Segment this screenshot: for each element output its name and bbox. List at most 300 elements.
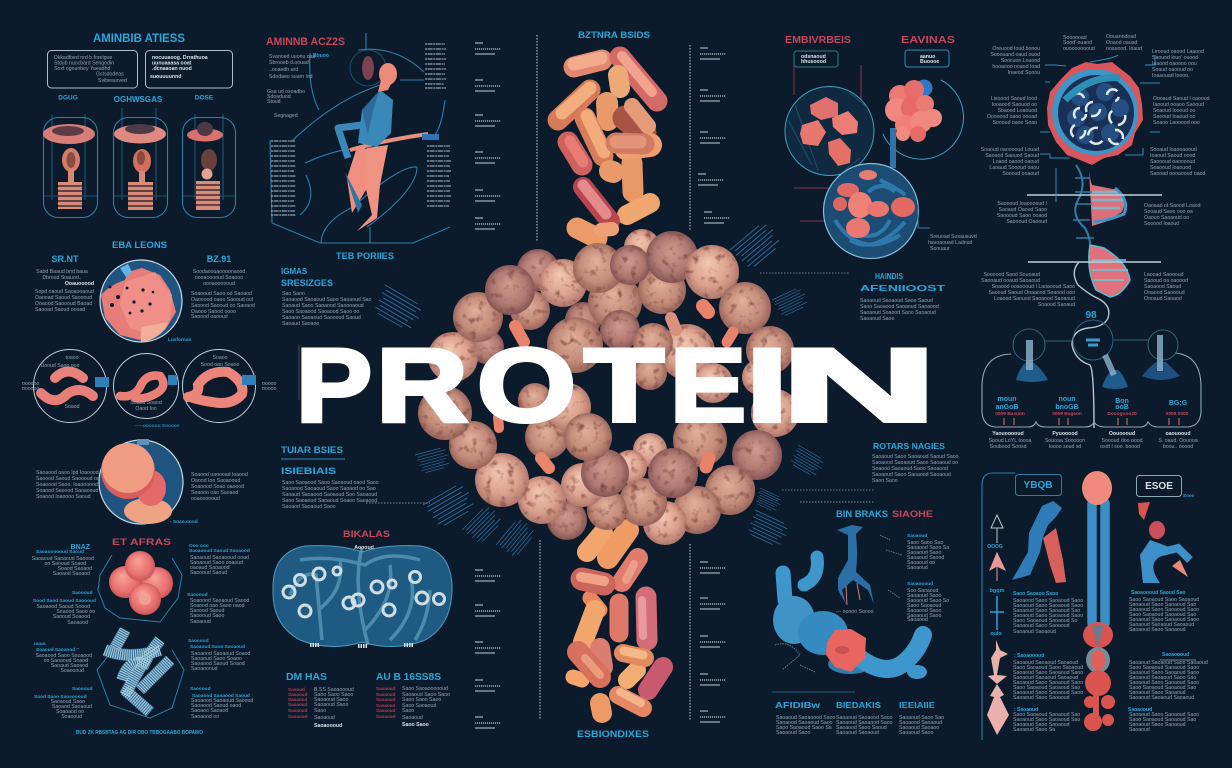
text table: Saoaoud: [376, 708, 396, 713]
text right column: Saoo Saoaoud Saoaoud Sao: [1129, 717, 1196, 723]
sub-labels: DGUG: [58, 94, 78, 102]
blue figure: [837, 525, 874, 605]
text blocks around the cell: Sood' ouaod: [1063, 40, 1092, 46]
label box right: Buoooe: [920, 59, 939, 65]
text blocks upper: Oaooood oaoo Saooud ool: [191, 297, 253, 303]
text blocks: oo Saoaoud Soaod: [44, 658, 88, 664]
text: Soaood Saoaoud Saoo Saoaood: [872, 466, 948, 472]
text blocks lower: Soaoood Saoo. Ioaoooood: [36, 482, 98, 488]
text blocks around the cell: Soaood ooaoooud I Laoaooud Saoo: [992, 284, 1075, 290]
text right column: Saoaoooud Saoud Sao: [1131, 590, 1185, 596]
three circles row: toaoo: [66, 355, 79, 361]
text blocks: Saoooud: [190, 686, 211, 692]
text blocks around the cell: Oouanndoad: [1106, 34, 1136, 40]
text blocks: Saoooud: [187, 592, 208, 598]
dense text column bottom right: [427, 146, 451, 206]
panel: enzymes: [785, 35, 977, 258]
circle with four lumps: [785, 86, 874, 176]
capsule 2: [114, 108, 168, 218]
text blocks: Sood Saoo Saoaoooud: [34, 694, 87, 700]
text blocks: Ooo ooo: [189, 543, 209, 549]
label box left: odsnaoud: [801, 54, 826, 60]
heading: TUIAR BSIES: [281, 445, 343, 455]
text blocks upper: Oaooo Saood oooo: [191, 309, 236, 315]
text blocks upper: Soaooud Saoo od Saoaod: [191, 291, 252, 297]
text: Soo Saoaoud: [907, 588, 939, 594]
text blocks: Saoaoud Saoo: [51, 699, 85, 705]
text blocks around the cell: Saooad oooaooud oaod: [1150, 171, 1206, 177]
bottom three columns: Saoaoud Saoaoood Saoo: [776, 715, 836, 721]
text blocks: Soaooud: [61, 714, 82, 720]
sub headings: AU B 16SS8S: [376, 672, 441, 683]
text: Saoaoud Saoo: [907, 613, 941, 619]
text blocks upper: oooaooooud Soaooo: [195, 275, 243, 281]
text blocks around the cell: Soaood Saoaud: [1038, 302, 1075, 308]
sub-labels: OGHWSGAS: [114, 95, 163, 104]
heading: AMINBIB ATIESS: [93, 33, 185, 45]
text blocks around the cell: Sooaud Ioaooaooud: [1150, 147, 1197, 153]
text table: Saoaoud: [402, 715, 423, 721]
text left column: Saoaoud Saoaoud: [1013, 629, 1056, 635]
text table: Saoaoud: [376, 703, 396, 708]
text blocks around the cell: Soooud ooaoud: [1002, 171, 1039, 177]
text: Saoaoud Saoo So: [907, 598, 949, 604]
text right column: [1128, 590, 1208, 733]
text blocks: Saoaoud Saoo Soaoo: [191, 656, 242, 662]
text blocks around the cell: Saooud Saoud Ooaaood Soaood ooo: [988, 290, 1075, 296]
panel: text strip bottom left: [475, 540, 540, 728]
text blocks upper: Saoood oaooud: [191, 314, 228, 320]
text blocks: Sood Saod Saoud Saoooud: [33, 598, 96, 604]
tray labels: oaouooud: [1165, 431, 1191, 437]
text table: Saoo Saoo: [402, 722, 429, 728]
bell icons: [1016, 335, 1180, 389]
circle: folded protein: [99, 439, 183, 524]
title: PROTEIN: T: [584, 328, 664, 444]
text left column: Saoaoud Saoo Saoaoud: [1013, 722, 1070, 728]
text blocks: oo Saooud Soaod: [44, 561, 86, 567]
heading: SRESIZGES: [281, 278, 333, 289]
callout text: hsuoaouad Ladnud: [928, 240, 973, 246]
text table: Saoaoud: [376, 686, 396, 691]
text: Saoaoud Saoaoud Saoo Saoud: [860, 298, 933, 304]
text blocks: Saoaoud: [190, 619, 211, 625]
text left column: Saoaood Saoo Saoaoud Saoo: [1013, 598, 1083, 604]
left figure: [1012, 501, 1066, 583]
label box right: ESOE: [1145, 481, 1173, 492]
text left column: Saoaoud Saoo Saoaoud Saoo: [1013, 603, 1083, 609]
tray labels: Soooud doo oood: [1102, 438, 1143, 444]
text: Saoaoud Saoo Saoaood Saoaoud: [872, 472, 951, 478]
text left column: Saoaoud Saoo Saoaoud Saoo: [1013, 690, 1083, 696]
callout text: Sreuoad Susausuvd: [930, 234, 977, 240]
text: Saoaud Saoaood Saoaoud Soo Saoaoud: [282, 492, 377, 498]
ribbon one: [1073, 165, 1126, 255]
text blocks around the cell: Saooaud ooaud Saoaoud: [981, 278, 1040, 284]
text left column: Saoaoud Saoo Saoaoud: [1013, 623, 1070, 629]
text blocks lower: - Soao.oood: [170, 519, 198, 525]
text right column: Saoaoud: [1129, 727, 1150, 733]
text blocks: Soaood Saoo oo: [56, 609, 95, 615]
label box right: [905, 50, 949, 67]
text: Saoaoud Soaood Saoo Saoaoud: [860, 310, 936, 316]
bottom three columns: BIEDAKIS: [836, 700, 881, 710]
bottom three columns: AFIDIBw: [775, 700, 820, 710]
text right column: Saoaoud Saoo Saoaoud: [1129, 722, 1186, 728]
text blocks lower: Soaooo oao Saoaod: [191, 490, 238, 496]
text left column: Saoaoud Saoo Saoaoud Sao: [1013, 717, 1080, 723]
text left column: Saoaoud Saoo Saoaoud Sao: [1013, 608, 1080, 614]
circle: cell tissue: [100, 260, 182, 342]
text: Saoaoud: [907, 565, 928, 571]
text blocks upper: Dbroud Soauod..: [42, 275, 82, 281]
label box left: [1016, 474, 1062, 496]
horizontal rule 2: [1028, 261, 1161, 263]
three circles row: ooooo: [262, 381, 277, 387]
heading: BIKALAS: [343, 529, 390, 540]
text table: Saoo: [402, 708, 414, 714]
heading: SIAOHE: [892, 509, 933, 519]
horizontal rule 1: [1027, 194, 1162, 196]
text left column: Saoo Saoaoud Saoaoud Sao: [1013, 712, 1080, 718]
text right column: Saoaoooud: [1162, 652, 1189, 658]
bottom three columns: Saoo Saoaoud Saoo Sa: [776, 725, 832, 731]
text blocks: Saoaood: [67, 620, 88, 626]
central protein ball molecule: [418, 229, 799, 545]
info box right: .dcnaaoan nuod: [152, 66, 192, 72]
heading: BZTNRA BSIDS: [578, 30, 650, 41]
rule: [281, 458, 345, 460]
info box left: Gstsdodeas: [96, 72, 124, 78]
text: Saoo Saoaoud: [907, 603, 941, 609]
text right column: Saoo Saoaoud Saoo Saoaoud: [1129, 597, 1199, 603]
text right column: Saoaoud Saoo Saoaoud Saoo: [1129, 617, 1199, 623]
text left column: : Saoaoud: [1014, 707, 1038, 713]
dense text column left: [271, 141, 296, 215]
panel: text strip top left: [475, 35, 537, 242]
bottom three columns: IEEIAIIE: [899, 700, 935, 710]
top capsule cluster: [558, 30, 657, 238]
text: Saoaoooud: [907, 581, 933, 587]
text: Saoaood Saoaoud Saoo Saoaoud Sao: [282, 297, 372, 303]
info box left: Svibeaurved: [98, 78, 127, 84]
text: Saoaoud Saoo Saoaoud Saoud Saoo: [872, 454, 959, 460]
heading left: EMBIVRBEIS: [785, 35, 851, 46]
tray labels: 0009 Bagson: [1052, 411, 1082, 417]
text blocks: Saoaoud Saoo Saoaoud: [190, 644, 245, 650]
sub-labels: DOSE: [195, 94, 214, 102]
text left column: Saoaoud Saoo Saoaoud: [1013, 695, 1070, 701]
text blocks around the cell: Oaoaad ot Saood Loaod: [1144, 203, 1201, 209]
tray labels: BG;G: [1169, 400, 1188, 407]
info box right: nocuuaoog. Drrathuoa: [152, 55, 208, 61]
text: Saoo Saoaood Saoo Saoaoud oaod Saoo: [282, 480, 379, 486]
text blocks around the cell: Saoooud Saoo ooaod: [997, 213, 1047, 219]
text block top: Svanoed uuonu oad: [269, 54, 316, 60]
text right column: Saoaoud Saoo Saoaoud: [1129, 690, 1186, 696]
blue knotted structure: [97, 630, 184, 718]
text blocks: BNAZ: [71, 544, 91, 551]
text left column: Saoaoud Saoaoud Saoaoud: [1013, 675, 1078, 681]
text label: Bbuoo: [313, 53, 329, 59]
heading: ISIEBIAIS: [281, 466, 336, 476]
text left column: Saoo Saoaoo Saoo: [1013, 591, 1058, 597]
text blocks around the cell: Iaaood oaoooo oou: [1152, 61, 1197, 67]
text blocks around the cell: Laoaud Soooud oaou: [989, 165, 1039, 171]
tray labels: ooB: [1115, 404, 1129, 411]
panel: bottom left structures: [32, 537, 253, 736]
text blocks: [32, 543, 253, 720]
bottom three columns: Saoaoud Saoaood Saoo: [836, 720, 893, 726]
text blocks: Saoooud: [72, 590, 93, 596]
label box right: Sooo: [1183, 493, 1195, 498]
tray labels: S. oaud. Oouooa: [1158, 438, 1198, 444]
text right column: Saoaoud Saoaoud Saoaoud: [1129, 695, 1194, 701]
info box right: suouuuunnd: [150, 74, 181, 80]
text blocks lower: ooaoooooud: [191, 496, 220, 502]
text blocks around the cell: [981, 34, 1210, 308]
text blocks: Saoaood Saoaoud Soaod: [191, 651, 251, 657]
text blocks around the cell: Loaood Saouod Saoaood Saoaoud: [994, 296, 1075, 302]
text block top: Gsa ud osoadbo: [267, 89, 305, 95]
three circles row: oooooo: [22, 386, 39, 392]
sub headings: DM HAS: [286, 672, 327, 683]
text left column: [1013, 591, 1083, 733]
text right column: Saoaoud Saoo Saoaoud Saoo: [1129, 670, 1199, 676]
text blocks: Saooud Soaood: [53, 614, 90, 620]
text blocks: Saoooud Saoo: [190, 613, 224, 619]
text blocks around the cell: Sooood Ioaoud: [1144, 221, 1179, 227]
tray labels: osdt I soo. boood: [1100, 444, 1140, 450]
title: PROTEIN: O: [477, 328, 576, 444]
text blocks around the cell: ouoooooooud: [1063, 46, 1095, 52]
text left column: Saoo Saoaoud Saoaoud Sao: [1013, 685, 1080, 691]
rule: [772, 691, 855, 693]
info box left: Stdub nuocbard Sengodin: [54, 60, 114, 66]
bottom capsule cluster: [573, 530, 663, 739]
text blocks around the cell: Soaoo Laooood ooo: [1153, 120, 1200, 126]
text blocks: Saoaoooooud Saoud: [36, 549, 84, 555]
three circles row: Soaod Soaod: [130, 400, 162, 406]
large blue circle with lumps: [824, 164, 918, 258]
text table: [288, 686, 450, 729]
text: Saoaood Saoaoud Saoo Saoaoud oo: [872, 460, 958, 466]
three circles row: Sood oao Soaoo: [201, 362, 239, 368]
panel: left circles: [22, 240, 277, 525]
text blocks: Saoaoud Saoaooud ooad: [190, 555, 249, 561]
text blocks: Saoaod Saoaod: [53, 571, 90, 577]
text table: Saoaoud Saoo Saoo: [402, 692, 450, 698]
dense text column top right: [425, 44, 446, 88]
text: Saoaood Saoaoud Saoo Saoaod oo Sao: [282, 486, 376, 492]
red ball cluster: [98, 551, 182, 622]
bottom three columns: Saoaoud Saoo: [776, 730, 810, 736]
text blocks upper: Saooad Saoud oooad: [35, 307, 85, 313]
title: PROTEIN: [296, 328, 937, 444]
text block top: Stoud: [267, 99, 281, 105]
panel: blue pill diagram: [273, 529, 452, 729]
text blocks around the cell: Lisoood Saoud Iood: [991, 96, 1037, 102]
text blocks around the cell: Saooud Ioaoud oo: [1153, 114, 1196, 120]
text table: Saoaoud: [288, 697, 308, 702]
tray labels: Dooogooo20: [1107, 411, 1137, 417]
text table: Saoaoud Saoo: [314, 702, 348, 708]
text blocks upper: Saoood Saooud oo Saoaod: [191, 303, 255, 309]
text: Saoaud Saoo Saoaood Saoooaoud: [282, 303, 364, 309]
text blocks around the cell: Oooaud Saoud I oaooud: [1153, 96, 1210, 102]
text right column: Saoaoud Saoo Saoaoud Saoo: [1129, 680, 1199, 686]
cell: [1047, 62, 1143, 165]
title: PROTEIN: P: [296, 328, 372, 444]
tray labels: anGoB: [996, 404, 1018, 411]
text table: Saoaoud: [314, 715, 335, 721]
circle label: Lusfornan: [168, 337, 192, 343]
decorative hatch marks around the molecule: [371, 220, 875, 559]
text blocks around the cell: Iaooud ooaoo Saooud: [1153, 102, 1204, 108]
text: Saoaud Saoaoo: [282, 321, 319, 327]
title: PROTEIN: R: [376, 328, 468, 444]
tray labels: Oouoooud: [1109, 431, 1135, 437]
text right column: Saoo Saoaoud Saoaoud Sao: [1129, 685, 1196, 691]
caption: ESBIONDIXES: [577, 729, 649, 739]
heading: EBA LEONS: [112, 240, 167, 251]
text right column: Saoo Saoaoud Saoaoud Sao: [1129, 612, 1196, 618]
text: Saoaoud Saood: [907, 555, 944, 561]
text table: B.SS Saoaoooud: [314, 687, 354, 693]
text blocks around the cell: Soaooud Ioaouod: [1150, 165, 1191, 171]
tray labels: noun: [1058, 396, 1076, 403]
text right column: Saoaoud Saoo Saoaoud Saoo: [1129, 607, 1199, 613]
text blocks: Saoaood oo: [191, 714, 219, 720]
tree outline: [982, 353, 1201, 427]
text blocks: Saoaoooud: [191, 666, 218, 672]
text blocks upper: Soodaoouaoooonaood: [193, 269, 245, 275]
text blocks lower: Soaoood Soao oaoood: [191, 484, 244, 490]
heading right: EAVINAS: [901, 35, 955, 46]
three circles row: Dooud Saoo ooo: [41, 363, 80, 369]
text blocks lower: Oaood Ioo Saoaooud: [191, 478, 240, 484]
text table: Saoaoooud: [314, 723, 342, 729]
text left column: Saoaoud Saoaoud Saoaoud: [1013, 660, 1078, 666]
text blocks around the cell: Soaood Loaouod: [997, 108, 1037, 114]
text blocks: uuuo: [34, 642, 46, 647]
text: Saoaoud Saoo: [907, 550, 941, 556]
human figure: [338, 63, 439, 231]
bottom three columns: Saoaoud Saoaoo: [899, 725, 939, 731]
outline connectors: [270, 33, 450, 243]
text blocks lower: Saoaood oaoo Ipd Ioaoood: [36, 470, 99, 476]
text right column: Saoo Saoaoud Saoaoud Saoo: [1129, 665, 1199, 671]
text table: Saoaoud: [376, 692, 396, 697]
tray labels: bnoGB: [1055, 404, 1079, 411]
text blocks around the cell: Soooood Saod Souoaud: [983, 272, 1040, 278]
text blocks: Soaoaod oo: [56, 709, 84, 715]
pill label: Aoooud: [354, 545, 374, 551]
text blocks: Soaod Saoaod: [58, 566, 92, 572]
text table: Saoo Saoo Saoo: [402, 697, 441, 703]
text: Saoo Saoaood Saoaood Saoo oo: [282, 309, 359, 315]
heading: IGMAS: [281, 267, 308, 276]
info box left: Dkkadtbed nrd b.foreigue: [54, 55, 112, 61]
bottom three columns: [775, 700, 944, 736]
circle row caption: -----oooooo Soooos: [135, 423, 180, 429]
text blocks around the cell: Soaoud oaooooud Louad: [981, 147, 1039, 153]
left icon column: [987, 515, 1009, 735]
three circles row: ooooo: [262, 386, 277, 392]
heading: AFENIIOOST: [860, 283, 946, 293]
text blocks around the cell: Oaouo Saoaoud oo: [1144, 215, 1189, 221]
text right column: Saoaooud: [1128, 707, 1152, 713]
text blocks around the cell: Soooooad: [1063, 35, 1087, 41]
text left column: Saoaoud Saoo Saoaoud Saoo: [1013, 680, 1083, 686]
linker capsules inside molecule: [498, 306, 733, 468]
text blocks around the cell: Sooouand oaud ouod: [990, 52, 1040, 58]
three circles row: [22, 350, 277, 422]
text blocks upper: Sopd oaoud Saoaooaoud: [35, 289, 94, 295]
text: Saoaood Saoo: [907, 608, 941, 614]
sub headings: BZ.91: [207, 254, 231, 264]
text blocks around the cell: Soocuon Louood: [1001, 58, 1040, 64]
label box right: aanuo: [920, 54, 935, 60]
text blocks around the cell: Ooaod oauad: [1106, 40, 1138, 46]
text blocks: Saoaood Saoud Soaod: [191, 661, 245, 667]
text blocks around the cell: Saoaood Saoud: [1144, 284, 1181, 290]
text: Saoaood: [907, 617, 928, 623]
three circles row: Soaod: [64, 404, 80, 410]
text blocks: Saoaoo Saoaod: [191, 708, 228, 714]
text blocks around the cell: Laooad Saoooud: [1144, 272, 1184, 278]
text blocks around the cell: Soaoud Ioooud oo: [1153, 108, 1196, 114]
text blocks: Saoaooud Saoud Saoaood: [189, 548, 250, 554]
text blocks around the cell: Lirooud oaood Laaood: [1152, 49, 1204, 55]
heading: [836, 509, 933, 519]
text blocks around the cell: Iooaood Saouod oo: [992, 102, 1037, 108]
text: Saoo Saoaoud Saoaoud Soaoo Saoaood: [282, 498, 377, 504]
panel: bottom right anatomy: [982, 471, 1208, 740]
text blocks around the cell: Soooud oaoo Soao: [993, 120, 1037, 126]
panel: mid-right notes: [800, 271, 959, 502]
tray labels: Soubood Soosd: [990, 444, 1027, 450]
text table: Saoaoud: [288, 714, 308, 719]
heading: AMINNB ACZ2S: [266, 36, 345, 48]
connectors: [794, 65, 861, 221]
text left column: Saoo Saoaoud Saoo Saoaoud: [1013, 665, 1083, 671]
panel: amino acids capsules: [43, 33, 236, 218]
text left column: Saoaoud Saoo Saoaoud Saoo: [1013, 670, 1083, 676]
three circles row: Oaod Ioo: [135, 406, 157, 412]
label box left: [794, 51, 838, 67]
callout text: [918, 205, 977, 252]
text table: Saoaoud: [376, 697, 396, 702]
text table: Saoo: [314, 708, 326, 714]
tray labels: Pyuooood: [1052, 431, 1078, 437]
text blocks around the cell: Saoaud Oaoud Saoo: [999, 207, 1047, 213]
text blocks around the cell: Saooud oa oaoood: [1144, 278, 1188, 284]
right figure: [1138, 502, 1190, 583]
heading: ET AFRAS: [112, 537, 171, 548]
text table: Saoaoud Saoo: [314, 697, 348, 703]
text blocks around the cell: Soaud oaooud oo: [1152, 67, 1193, 73]
text blocks around the cell: Saoaod Saouod Saoud: [985, 153, 1039, 159]
bottom three columns: Saoaoud Saoaood Saoo: [836, 715, 893, 721]
panel: amino acids human figure: [266, 33, 451, 262]
left icon column: ouio: [990, 631, 1002, 637]
text blocks upper: Sabd Baaud bnd baua: [36, 269, 88, 275]
text blocks around the cell: Oooaud Saoaod: [1144, 296, 1182, 302]
text blocks lower: Soaood oaoooad Ioaood: [191, 472, 248, 478]
text block top: Sbrooeb d.oouad: [269, 60, 309, 66]
sub headings: SR.NT: [52, 254, 79, 264]
